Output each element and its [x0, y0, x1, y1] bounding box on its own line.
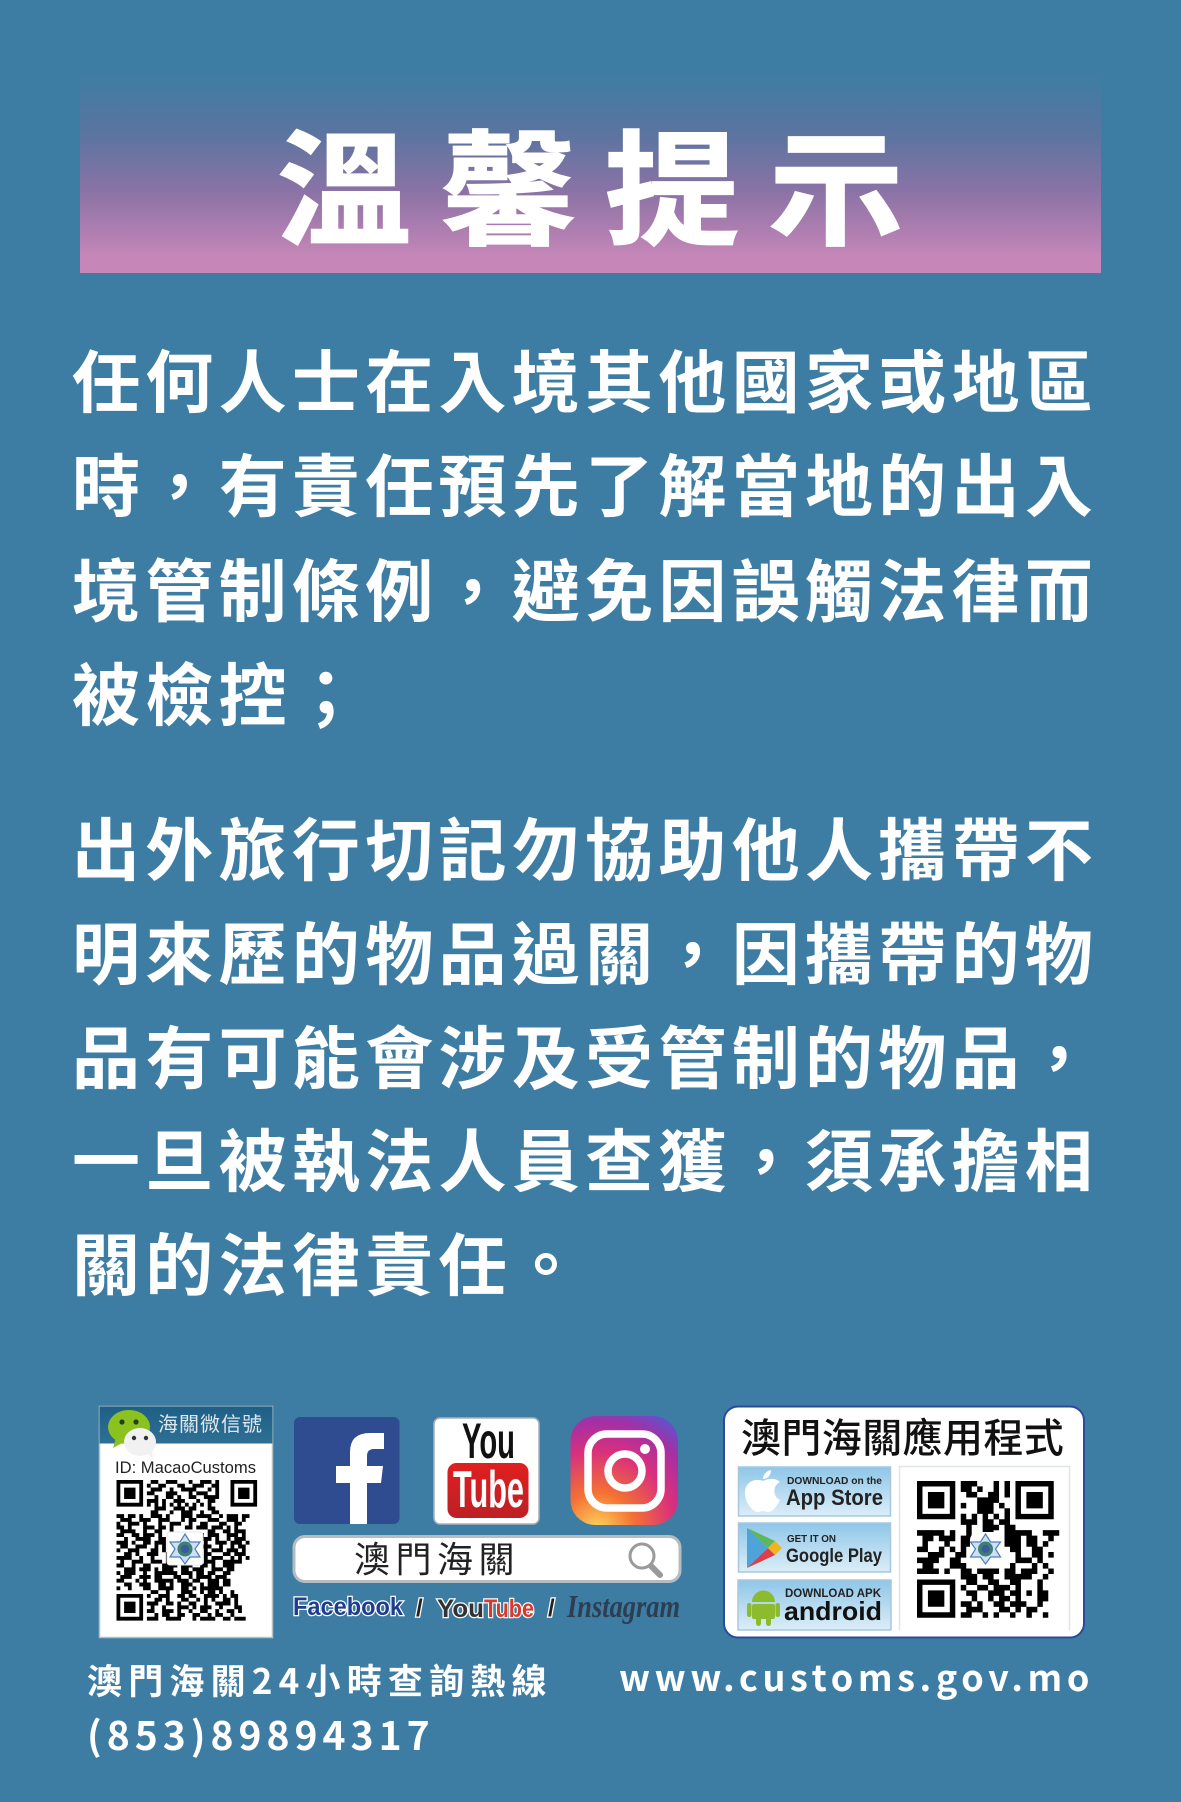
icon: Facebook [294, 1417, 400, 1524]
icon: YouTube: Tube [453, 1461, 524, 1519]
paragraph 1: 時，有責任預先了解當地的出入 [72, 432, 1098, 531]
website: www.customs.gov.mo [619, 1650, 1094, 1702]
app card [724, 1406, 1084, 1638]
icon: customs star logo [167, 1532, 203, 1565]
button: App Store: App Store [786, 1485, 883, 1510]
QR code: WeChat [116, 1480, 257, 1621]
social media labels: Instagram [566, 1588, 680, 1624]
paragraph 1: 被檢控； [72, 641, 365, 740]
button: App Store [738, 1467, 890, 1516]
icon: Instagram [570, 1416, 678, 1525]
button: App Store: DOWNLOAD on the [787, 1475, 882, 1487]
social media labels [293, 1588, 680, 1624]
social media labels: / [416, 1595, 423, 1622]
icon: customs star logo [970, 1532, 1002, 1565]
paragraph 2: 品有可能會涉及受管制的物品， [72, 1004, 1098, 1103]
paragraph 2: 關的法律責任。 [72, 1211, 585, 1310]
button: Google Play [738, 1523, 890, 1572]
icon: android robot [747, 1590, 780, 1626]
paragraph 2 [72, 796, 1098, 1310]
paragraph 2: 出外旅行切記勿協助他人攜帶不 [72, 796, 1098, 895]
app card title: 澳門海關應用程式 [741, 1406, 1064, 1464]
paragraph 2: 一旦被執法人員查獲，須承擔相 [72, 1107, 1098, 1206]
button: android: DOWNLOAD APK [785, 1588, 882, 1600]
social media labels: Tube [484, 1595, 534, 1623]
hotline label: 澳門海關24小時查詢熱線 [87, 1654, 553, 1705]
icon: apple [745, 1470, 780, 1512]
search bar [294, 1531, 680, 1583]
icon: magnifier [630, 1544, 660, 1575]
QR code: app [917, 1481, 1059, 1618]
icon: YouTube [434, 1413, 539, 1524]
QR box: app [900, 1466, 1070, 1630]
icon: play triangle [747, 1528, 782, 1568]
hotline number: (853)89894317 [87, 1706, 435, 1762]
title banner [80, 75, 1101, 273]
icon: YouTube: You [462, 1413, 515, 1469]
paragraph 2: 明來歷的物品過關，因攜帶的物 [72, 900, 1098, 999]
button: android [738, 1580, 891, 1630]
paragraph 1: 境管制條例，避免因誤觸法律而 [72, 537, 1098, 636]
button: android: android [784, 1596, 882, 1626]
social media labels: / [548, 1595, 555, 1622]
paragraph 1: 任何人士在入境其他國家或地區 [72, 328, 1098, 427]
WeChat ID: ID: MacaoCustoms [115, 1458, 256, 1477]
WeChat header [100, 1406, 272, 1444]
paragraph 1 [72, 328, 1098, 740]
button: Google Play: Google Play [786, 1546, 882, 1567]
button: Google Play: GET IT ON [787, 1533, 836, 1545]
icon: WeChat bubbles [108, 1410, 156, 1459]
WeChat card [100, 1406, 272, 1638]
search bar: 澳門海關 [354, 1531, 520, 1583]
WeChat label: 海關微信號 [158, 1408, 263, 1437]
title: 溫馨提示 [277, 91, 933, 272]
social media labels: Facebook [293, 1593, 403, 1621]
social media labels: You [437, 1595, 484, 1623]
